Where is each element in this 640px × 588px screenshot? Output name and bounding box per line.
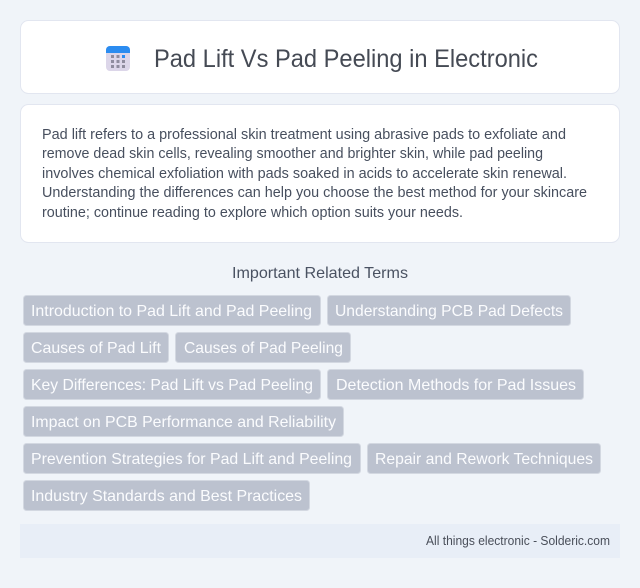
chip: causes of pad lift: Causes of Pad Lift (31, 340, 162, 357)
heading: important related terms: Important Related Terms (232, 265, 408, 282)
chip: key differences: Key Differences: Pad Lift vs Pad Peeling (31, 377, 313, 394)
chip: introduction: Introduction to Pad Lift and Pad Peeling (31, 303, 312, 320)
term chips (24, 296, 600, 510)
chip: repair (368, 444, 600, 474)
chip: prevention: Prevention Strategies for Pad Lift and Peeling (31, 451, 352, 468)
footer (20, 524, 620, 558)
panel: description: remove dead skin cells, revealing smoother and brighter skin, while pad peeling (42, 146, 543, 162)
panel: description: involves chemical exfoliation with pads soaked in acids to accelerate skin renewal. (42, 166, 567, 182)
panel: header (20, 20, 620, 94)
chip: industry standards: Industry Standards and Best Practices (31, 488, 302, 505)
chip: causes of pad peeling: Causes of Pad Peeling (184, 340, 343, 357)
chip: prevention (24, 444, 360, 474)
chip: impact: Impact on PCB Performance and Reliability (31, 414, 336, 431)
chip: introduction (24, 296, 320, 326)
chip: key differences (24, 370, 320, 400)
chip: industry standards (24, 480, 310, 510)
footer: All things electronic - Solderic.com (426, 534, 610, 548)
chip: understanding defects (328, 296, 570, 326)
panel: description: Understanding the differences can help you choose the best method for your skincare (42, 185, 587, 201)
panel: description: Pad lift refers to a professional skin treatment using abrasive pads to exfoliate and (42, 127, 566, 143)
chip: detection methods (328, 370, 584, 400)
chip: impact (24, 406, 344, 436)
chip: causes of pad lift (24, 332, 168, 362)
chip: causes of pad peeling (176, 332, 350, 362)
panel: description: routine; continue reading to explore which option suits your needs. (42, 205, 463, 221)
chip: repair: Repair and Rework Techniques (375, 451, 593, 468)
panel: description (20, 104, 620, 242)
chip: understanding defects: Understanding PCB Pad Defects (335, 303, 563, 320)
title: Pad Lift Vs Pad Peeling in Electronic (154, 45, 538, 73)
chip: detection methods: Detection Methods for Pad Issues (336, 377, 576, 394)
icon: calendar (106, 46, 130, 71)
